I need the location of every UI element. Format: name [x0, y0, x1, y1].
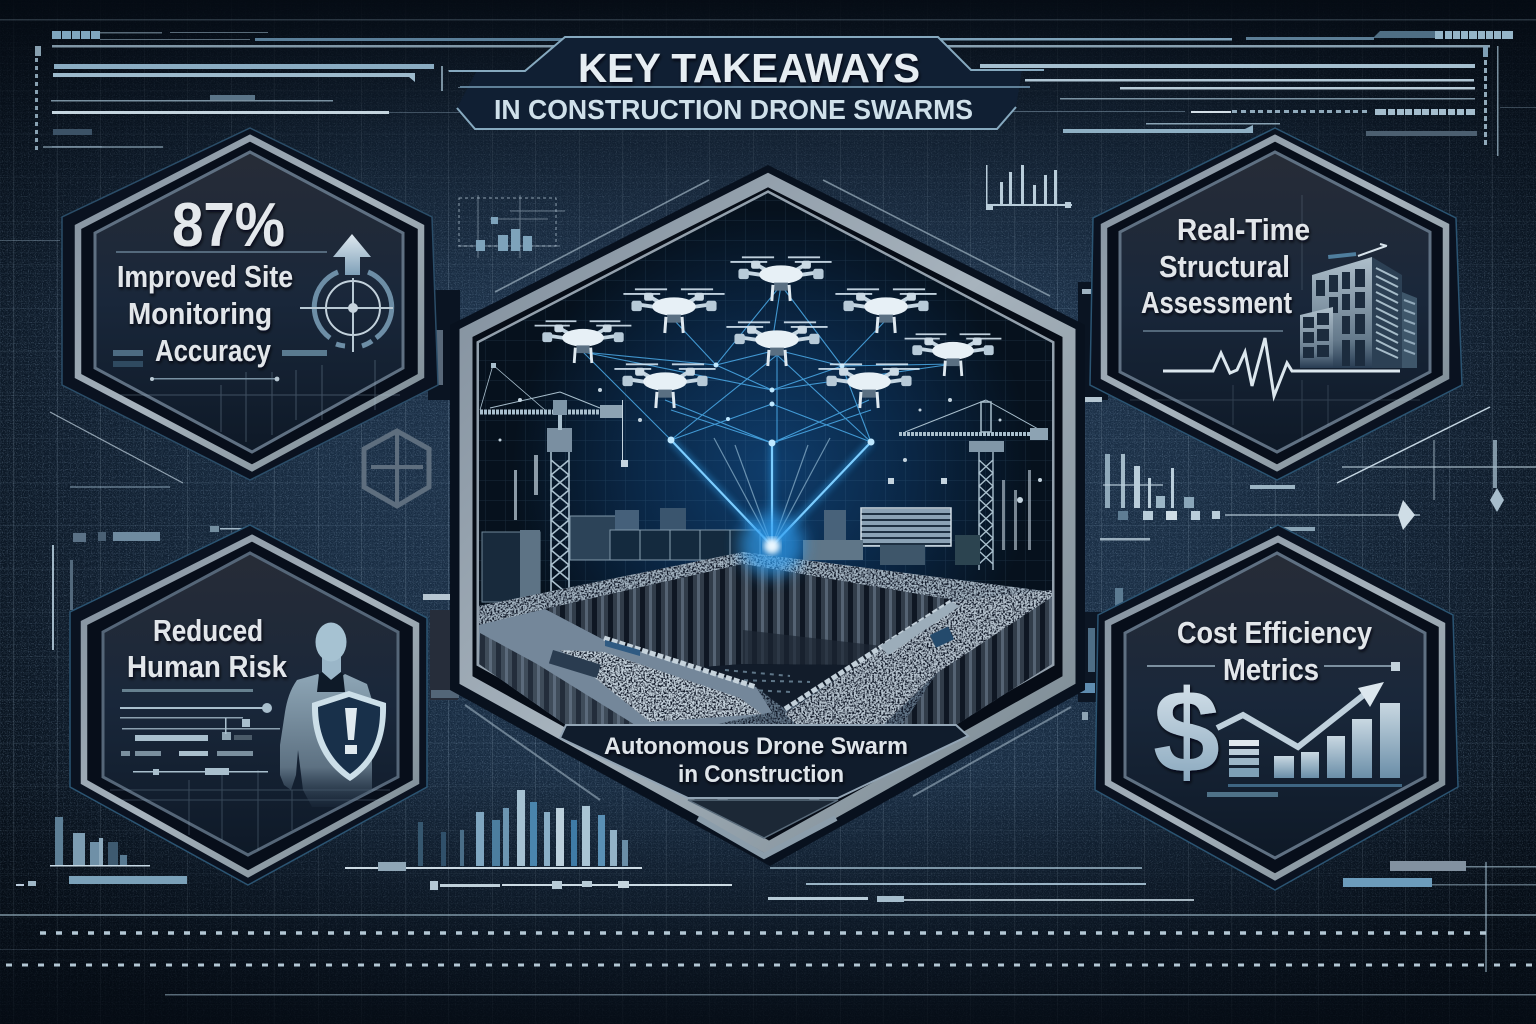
heading lines	[1177, 615, 1373, 687]
icon: pulse line	[1163, 338, 1400, 396]
divider	[1143, 330, 1283, 332]
background lines in panel	[110, 770, 390, 850]
panel: 87% improved site monitoring accuracy	[62, 128, 438, 480]
mini chart: lower left	[16, 526, 250, 886]
mini chart: upper left	[458, 195, 565, 258]
background buildings	[482, 508, 980, 602]
caption banner	[560, 725, 968, 856]
connector brackets: left	[423, 290, 460, 700]
connector brackets: right	[1078, 282, 1123, 720]
icon: shield with exclamation	[312, 691, 386, 781]
blueprint lines: bottom	[0, 861, 1536, 996]
mini chart: right middle	[1100, 407, 1536, 540]
mini chart: bottom centre	[345, 790, 732, 890]
centre hexagon frame	[450, 165, 1085, 866]
panel: reduced human risk	[70, 525, 427, 885]
back rim of site	[479, 552, 1052, 625]
heading lines: Real-Time	[1177, 212, 1310, 247]
label lines: Improved Site	[117, 259, 293, 294]
label lines	[117, 259, 293, 368]
heading lines: Cost Efficiency	[1177, 615, 1373, 650]
panel: cost efficiency metrics	[1095, 525, 1458, 890]
mini chart: upper right	[986, 165, 1072, 210]
divider lines	[1147, 662, 1400, 671]
drones	[535, 257, 1001, 408]
label lines: Monitoring	[128, 296, 272, 331]
blueprint lines: top left	[0, 31, 565, 488]
heading lines	[1141, 212, 1310, 320]
background lines in panel	[1130, 195, 1420, 440]
icon: worker silhouette	[280, 622, 372, 807]
stat: 87%: 87%	[172, 191, 285, 260]
heading lines	[127, 613, 288, 684]
decorative data lines	[120, 689, 280, 775]
icon: target with up arrow	[300, 234, 393, 352]
blueprint lines: top right	[0, 19, 1536, 156]
caption text: Autonomous Drone Swarm	[604, 733, 908, 760]
panel: real-time structural assessment	[1090, 128, 1462, 480]
dotted rules: bottom	[6, 933, 1536, 965]
decorative bars	[113, 350, 327, 381]
title banner	[449, 37, 1044, 129]
icon: building	[1300, 244, 1417, 368]
background lines in panel	[120, 360, 400, 442]
laser beams to site	[671, 438, 871, 546]
night sky with grid	[479, 193, 1052, 692]
tower crane right	[899, 400, 1048, 570]
heading lines: Metrics	[1223, 652, 1319, 687]
heading lines: Assessment	[1141, 285, 1292, 320]
heading lines: Reduced	[153, 613, 263, 648]
left terrace	[479, 609, 772, 728]
heading lines: Human Risk	[127, 649, 288, 684]
decorative hexagon icon: cross outline	[364, 431, 429, 506]
heading: KEY TAKEAWAYS	[578, 45, 920, 91]
site ground	[479, 552, 1052, 730]
right terrace	[785, 590, 1052, 728]
subheading: IN CONSTRUCTION DRONE SWARMS	[494, 94, 973, 125]
caption text	[604, 733, 908, 788]
heading lines: Structural	[1159, 249, 1290, 284]
tower crane left	[480, 363, 622, 595]
icon: dollar sign: $	[1153, 666, 1220, 798]
excavation pit	[545, 564, 953, 709]
caption text: in Construction	[678, 761, 844, 788]
bar chart with trend arrow	[1207, 682, 1402, 797]
light source glow	[740, 513, 804, 577]
label lines: Accuracy	[155, 333, 272, 368]
centre frame accent lines	[465, 180, 1071, 800]
hanging markers	[498, 388, 1042, 550]
divider	[116, 251, 327, 253]
network nodes	[668, 362, 874, 446]
centre illustration: drone swarm over construction site	[470, 185, 1060, 735]
swarm links	[583, 285, 953, 443]
